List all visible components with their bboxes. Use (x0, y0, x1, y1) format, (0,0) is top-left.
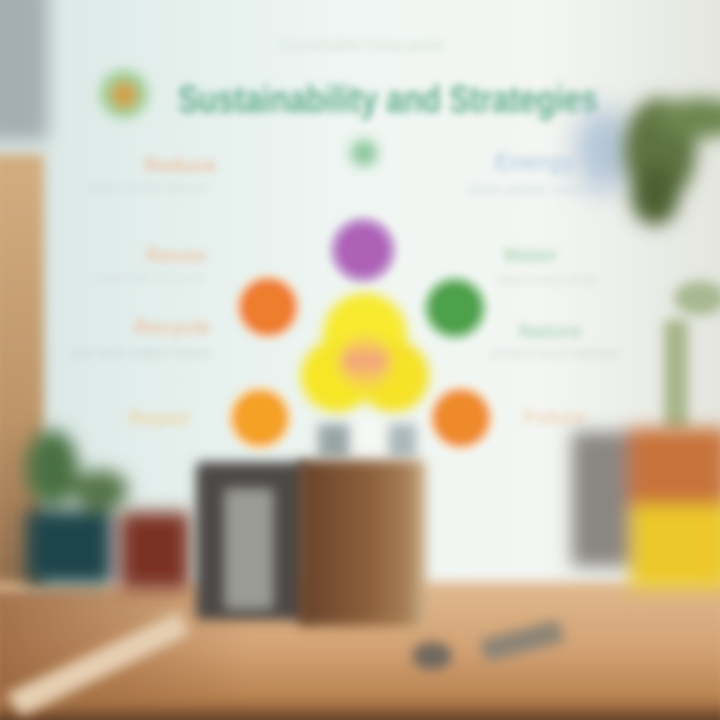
right column labels: save every drop (495, 271, 595, 287)
left column labels: materials at home (94, 269, 206, 285)
dark top left corner (0, 0, 48, 140)
main title: Sustainability and Strategies (178, 79, 598, 121)
right column labels: protect local habitats (491, 345, 619, 361)
plant top right (576, 108, 636, 192)
label 7: Nature (518, 321, 582, 343)
small item on desk (412, 620, 564, 670)
pencil on desk (6, 612, 190, 716)
yellow trefoil centre (301, 293, 429, 412)
purple circle (330, 217, 396, 283)
brown cup (298, 460, 426, 626)
orange circle bottom right (429, 386, 493, 450)
small green icon (349, 138, 379, 168)
grey cup (196, 462, 308, 620)
label 6: Water (503, 245, 558, 267)
small heading: Sustainable living guide (278, 37, 446, 54)
small grey marks below centre (318, 420, 416, 458)
plant stem and leaf right (664, 281, 720, 430)
right column labels: clean power sources (466, 181, 604, 198)
desk surface (0, 582, 720, 720)
label 4: Repair (129, 408, 191, 430)
label 5: Energy (494, 149, 576, 176)
green circle (423, 276, 487, 340)
orange circle top left (236, 275, 300, 339)
orange circle bottom left (228, 386, 292, 450)
label 1: Reduce (144, 155, 216, 177)
diagram (228, 217, 493, 458)
left column labels (70, 155, 216, 430)
label 3: Recycle (134, 317, 210, 339)
plant leaves (624, 98, 720, 225)
logo icon (100, 70, 148, 118)
title with logo (100, 37, 598, 121)
stacked pots right (572, 428, 720, 589)
left column labels: sort and collect items (70, 345, 210, 362)
wooden post left (0, 154, 44, 594)
left column labels: waste at the source (86, 179, 209, 195)
label 8: Future (524, 407, 586, 429)
right column labels (466, 149, 619, 429)
plants and pots left (26, 430, 190, 590)
label 2: Reuse (146, 245, 206, 267)
